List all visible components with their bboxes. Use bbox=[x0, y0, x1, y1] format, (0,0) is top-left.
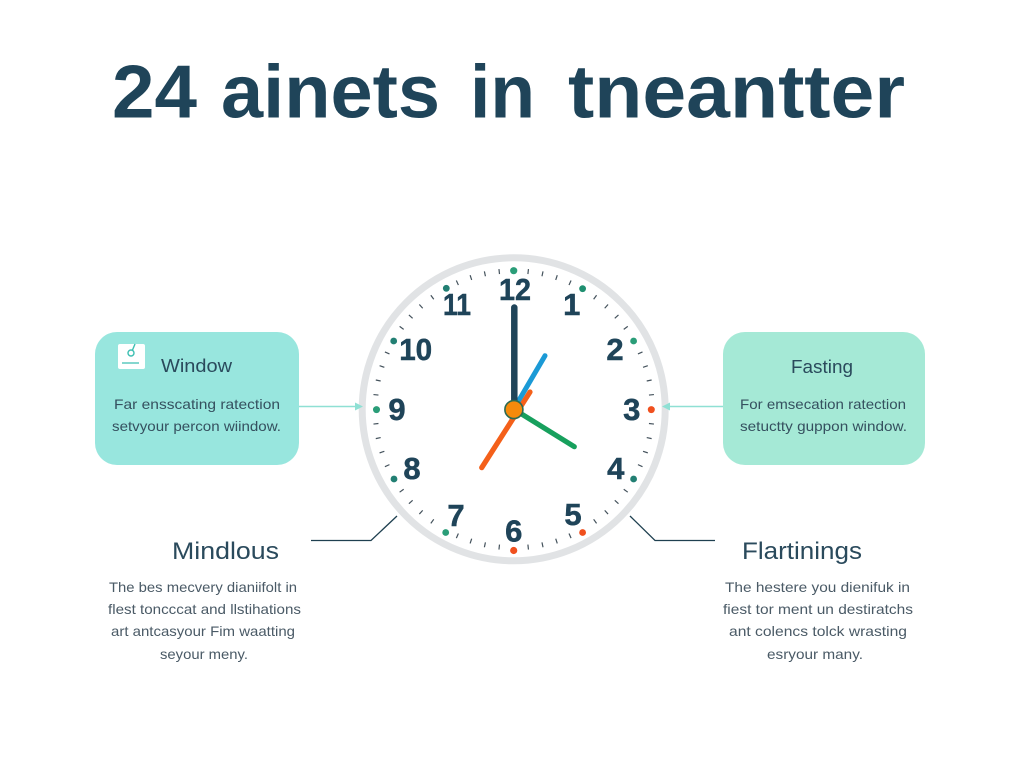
panel: window bbox=[95, 332, 299, 465]
leader line: left bbox=[311, 516, 397, 540]
text: flartinings body: fiest tor ment un destiratchs bbox=[723, 601, 913, 617]
text: flartinings body: The hestere you dienifuk in bbox=[725, 579, 910, 595]
hand: orange bbox=[482, 392, 530, 468]
hour numerals: 11 bbox=[443, 287, 471, 322]
text: window body: Far ensscating ratection bbox=[114, 396, 280, 412]
heading: mindlous: Mindlous bbox=[172, 538, 279, 565]
hour numerals bbox=[388, 272, 640, 548]
arrow: window to clock bbox=[299, 402, 363, 410]
text: mindlous body: seyour meny. bbox=[160, 646, 248, 662]
hour numerals: 2 bbox=[606, 332, 624, 367]
clock bbox=[362, 258, 665, 561]
text: mindlous body: The bes mecvery dianiifolt in bbox=[109, 579, 297, 595]
arrow: fasting to clock bbox=[662, 402, 723, 410]
hour numerals: 8 bbox=[403, 451, 421, 486]
text: mindlous body bbox=[108, 579, 301, 662]
panel: fasting bbox=[723, 332, 925, 465]
hour numerals: 5 bbox=[564, 497, 582, 532]
hour numerals: 6 bbox=[505, 514, 522, 548]
text: fasting body: For emsecation ratection bbox=[740, 396, 906, 412]
title: ainets bbox=[221, 50, 440, 134]
text: mindlous body: art antcasyour Fim waatting bbox=[111, 623, 295, 639]
block: mindlous bbox=[108, 538, 301, 662]
hand: blue bbox=[515, 356, 545, 407]
heading: window: Window bbox=[161, 356, 233, 376]
block: flartinings bbox=[723, 538, 913, 662]
hand: green bbox=[514, 409, 574, 447]
title: 24 bbox=[112, 50, 197, 134]
hour dots bbox=[373, 267, 655, 554]
hour numerals: 7 bbox=[447, 498, 465, 533]
text: window body bbox=[112, 396, 281, 434]
center pin bbox=[505, 401, 523, 419]
text: flartinings body: ant colencs tolck wrasting bbox=[729, 623, 907, 639]
title bbox=[112, 50, 905, 134]
icon: note bbox=[118, 344, 145, 369]
hour numerals: 10 bbox=[399, 332, 432, 367]
heading: flartinings: Flartinings bbox=[742, 538, 862, 565]
text: fasting body bbox=[740, 396, 907, 434]
hour numerals: 9 bbox=[388, 392, 406, 427]
hand: dark bbox=[511, 308, 518, 405]
leader line: right bbox=[630, 516, 715, 540]
hour numerals: 12 bbox=[499, 272, 531, 307]
hour numerals: 3 bbox=[623, 392, 640, 427]
title: in bbox=[470, 50, 535, 134]
text: fasting body: setuctty guppon window. bbox=[740, 418, 907, 434]
text: mindlous body: flest toncccat and llstihations bbox=[108, 601, 301, 617]
text: flartinings body: esryour many. bbox=[767, 646, 863, 662]
hour numerals: 1 bbox=[563, 287, 580, 322]
title: tneantter bbox=[568, 50, 905, 134]
text: window body: setvyour percon wiindow. bbox=[112, 418, 281, 434]
heading: fasting: Fasting bbox=[791, 357, 853, 377]
minute ticks bbox=[373, 269, 654, 550]
text: flartinings body bbox=[723, 579, 913, 662]
hour numerals: 4 bbox=[607, 451, 625, 486]
clock face bbox=[362, 258, 665, 561]
